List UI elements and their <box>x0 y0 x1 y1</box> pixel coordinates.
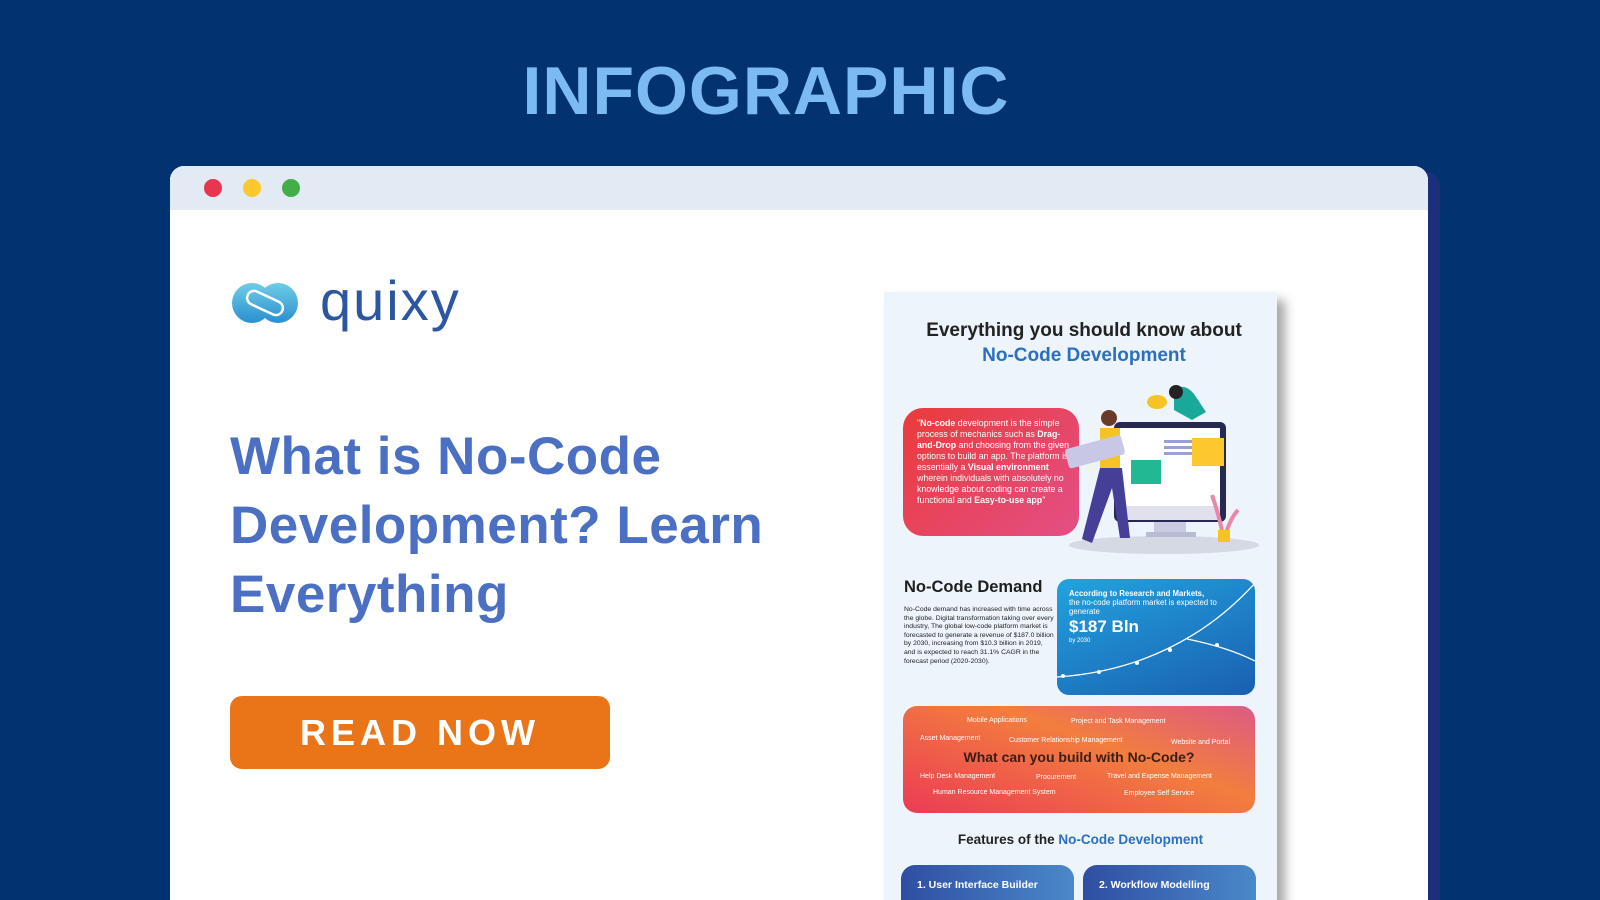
section heading: no-code demand: No-Code Demand <box>904 578 1042 596</box>
growth curve chart <box>1057 584 1255 678</box>
feature card 2 <box>1083 865 1256 900</box>
panel: what can you build: Asset Management <box>920 735 980 742</box>
panel: what can you build: Procurement <box>1036 774 1076 781</box>
panel: what can you build: Mobile Applications <box>967 717 1027 724</box>
panel: what can you build: Project and Task Management <box>1071 718 1165 725</box>
yellow dot <box>243 179 261 197</box>
panel: what can you build: Employee Self Service <box>1124 790 1194 797</box>
green dot <box>282 179 300 197</box>
panel: what can you build: Website and Portal <box>1171 739 1230 746</box>
demand paragraph: No-Code demand has increased with time across the globe. Digital transformation taking over every industry, The global low-code platform market is forecasted to generate a revenue of $187.0 billion by 2030, increasing from $10.3 billion in 2019, and is expected to reach 31.1% CAGR in the forecast period (2020-2030). <box>904 606 1054 665</box>
speech bubble: definition: "No-code development is the simple process of mechanics such as Drag-and-Drop and choosing from the given options to build an app. The platform is essentially a Visual environment wherein individuals with absolutely no knowledge about coding can create a functional and Easy-to-use app" <box>917 418 1069 505</box>
features heading: Features of the No-Code Development <box>958 832 1203 847</box>
panel: what can you build: Travel and Expense Management <box>1107 773 1212 780</box>
browser top bar <box>170 166 1428 210</box>
panel: what can you build: Customer Relationship Management <box>1009 737 1123 744</box>
button: read now: READ NOW <box>300 712 540 753</box>
panel title: No-Code Development <box>982 345 1186 366</box>
panel: what can you build <box>903 706 1255 813</box>
feature card 2: 2. Workflow Modelling <box>1099 879 1210 891</box>
stat card: $187 Bln: the no-code platform market is expected to generate <box>1069 598 1217 616</box>
logo text: quixy <box>320 269 461 332</box>
stat card: $187 Bln <box>1057 579 1255 695</box>
panel: infographic preview <box>884 292 1277 900</box>
icon: infinity logo <box>232 283 298 323</box>
stat card: $187 Bln: by 2030 <box>1069 638 1090 644</box>
title: INFOGRAPHIC <box>522 53 1010 129</box>
stat card: $187 Bln: According to Research and Markets, <box>1069 589 1204 598</box>
logo: quixy <box>232 269 461 332</box>
panel: what can you build: Human Resource Management System <box>933 789 1056 796</box>
panel title <box>926 320 1242 366</box>
panel title: Everything you should know about <box>926 320 1242 341</box>
button: read now <box>230 696 610 769</box>
feature card 1: 1. User Interface Builder <box>917 879 1038 891</box>
speech bubble: definition <box>903 408 1079 536</box>
heading: What is No-Code Development? Learn Everything <box>230 427 763 624</box>
feature card 1 <box>901 865 1074 900</box>
build heading: What can you build with No-Code? <box>964 749 1194 765</box>
browser window <box>170 166 1428 900</box>
illustration: monitor and people <box>1065 385 1259 554</box>
big number: $187 Bln <box>1069 617 1139 636</box>
red dot <box>204 179 222 197</box>
panel: what can you build: Help Desk Management <box>920 773 995 780</box>
